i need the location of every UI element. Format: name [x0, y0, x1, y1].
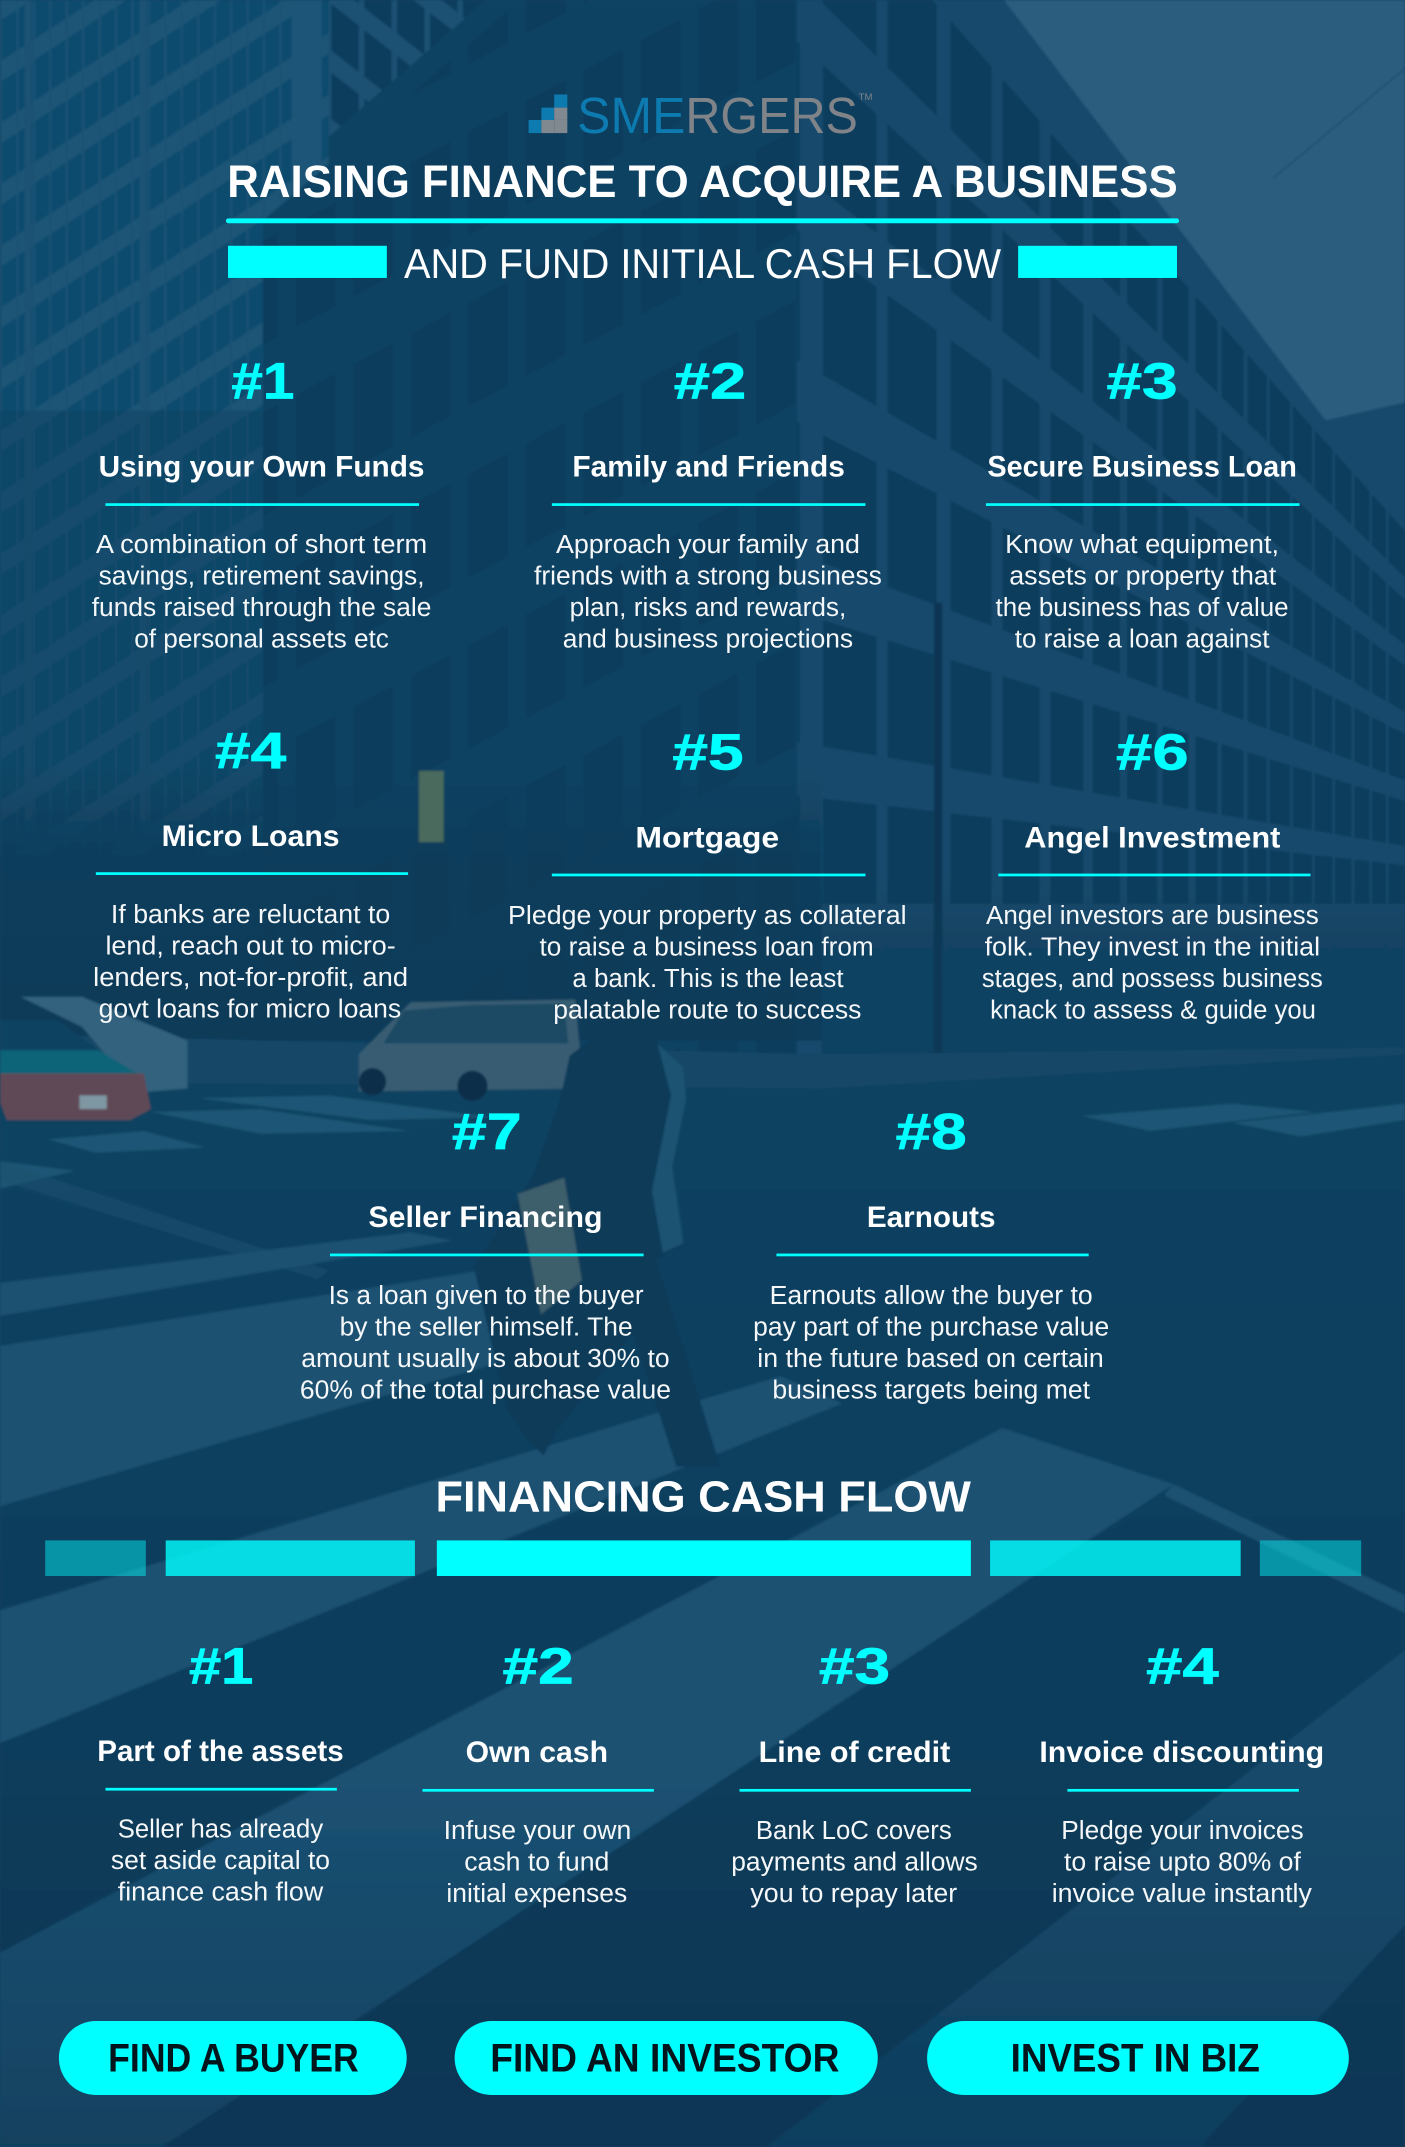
taxi	[0, 997, 188, 1120]
item 8: Earnouts: pay part of the purchase value	[753, 1314, 1109, 1342]
parked SUV	[359, 1000, 583, 1101]
lamp pole	[934, 602, 942, 1082]
pedestrian	[474, 1026, 720, 1466]
overhead wire	[1274, 68, 1405, 178]
cash flow 3: Line of credit: payments and allows	[731, 1848, 978, 1876]
traffic light	[419, 771, 444, 842]
item 7: Seller Financing: by the seller himself. The	[340, 1314, 633, 1342]
item 1: Using your Own Funds: savings, retirement savings,	[99, 563, 425, 591]
item 5: Mortgage: Pledge your property as collateral	[508, 902, 907, 930]
item 4: Micro Loans: Micro Loans	[162, 820, 340, 853]
sidewalk	[0, 1034, 1405, 1089]
item 8: Earnouts	[753, 1103, 1109, 1405]
item 7: Seller Financing: Seller Financing	[368, 1201, 603, 1234]
item 2: Family and Friends: Family and Friends	[572, 451, 845, 484]
item 5: Mortgage: a bank. This is the least	[572, 965, 844, 993]
item 4: Micro Loans: #4	[215, 722, 286, 779]
item 2: Family and Friends: and business projections	[563, 626, 853, 654]
subtitle with side bars: AND FUND INITIAL CASH FLOW	[404, 240, 1002, 287]
item 5: Mortgage: palatable route to success	[553, 997, 861, 1025]
item 2: Family and Friends	[534, 352, 882, 654]
item 6: Angel Investment: Angel Investment	[1024, 822, 1281, 855]
logo: SMERGERS: RGERS	[685, 87, 858, 144]
title underline	[226, 218, 1179, 223]
item 3: Secure Business Loan: Know what equipment,	[1005, 531, 1279, 559]
cash flow 4: Invoice discounting: #4	[1146, 1638, 1219, 1695]
item 1: Using your Own Funds: Using your Own Funds	[99, 451, 425, 484]
cash flow 3: Line of credit: you to repay later	[750, 1880, 958, 1908]
cash flow 1: Part of the assets: Part of the assets	[97, 1735, 344, 1768]
logo: SMERGERS: TM	[859, 92, 872, 103]
item 6: Angel Investment: stages, and possess business	[982, 965, 1323, 993]
item 2: Family and Friends: plan, risks and rewards,	[570, 594, 846, 622]
cash flow 3: Line of credit: #3	[819, 1638, 890, 1695]
cash flow 3: Line of credit	[731, 1638, 978, 1908]
cash flow 4: Invoice discounting	[1039, 1638, 1324, 1908]
cash flow 4: Invoice discounting: to raise upto 80% of	[1064, 1848, 1302, 1876]
item 1: Using your Own Funds: funds raised through the sale	[92, 594, 431, 622]
item 1: Using your Own Funds	[92, 352, 431, 654]
item 5: Mortgage: #5	[672, 724, 744, 781]
button: Invest in Biz: INVEST IN BIZ	[1011, 2037, 1260, 2081]
curb line	[0, 1161, 329, 1279]
cash flow 4: Invoice discounting: Pledge your invoices	[1061, 1817, 1304, 1845]
item 2: Family and Friends: Approach your family and	[556, 531, 860, 559]
segmented bar	[45, 1540, 1361, 1576]
heading: Financing Cash Flow: FINANCING CASH FLOW	[435, 1474, 971, 1522]
street	[0, 1054, 1405, 2147]
left glass building	[0, 0, 486, 876]
button: Find a Buyer: FIND A BUYER	[108, 2037, 359, 2081]
item 3: Secure Business Loan: to raise a loan against	[1015, 626, 1269, 654]
far crosswalk stripes	[0, 1095, 1405, 1189]
item 7: Seller Financing: amount usually is about 30% to	[301, 1345, 670, 1373]
title: RAISING FINANCE TO ACQUIRE A BUSINESS	[227, 156, 1178, 207]
item 6: Angel Investment	[982, 724, 1323, 1025]
item 6: Angel Investment: folk. They invest in the initial	[985, 934, 1320, 962]
item 6: Angel Investment: #6	[1116, 724, 1189, 781]
button: Find an Investor: FIND AN INVESTOR	[490, 2037, 839, 2081]
crossing stripes	[0, 1232, 1405, 2147]
cash flow 1: Part of the assets: set aside capital to	[111, 1847, 330, 1875]
storefronts	[0, 767, 822, 1041]
button: Find a Buyer	[59, 2021, 407, 2095]
item 6: Angel Investment: Angel investors are business	[986, 902, 1319, 930]
item 8: Earnouts: business targets being met	[772, 1377, 1090, 1405]
item 2: Family and Friends: friends with a strong business	[534, 563, 882, 591]
item 1: Using your Own Funds: #1	[231, 352, 294, 409]
item 1: Using your Own Funds: A combination of short term	[96, 531, 427, 559]
item 2: Family and Friends: #2	[674, 352, 746, 409]
cash flow 4: Invoice discounting: invoice value instantly	[1052, 1880, 1312, 1908]
item 3: Secure Business Loan: Secure Business Loan	[987, 451, 1297, 484]
button: Find an Investor	[455, 2021, 878, 2095]
item 4: Micro Loans: If banks are reluctant to	[111, 901, 390, 929]
item 7: Seller Financing: 60% of the total purchase value	[300, 1377, 671, 1405]
cash flow 4: Invoice discounting: Invoice discounting	[1039, 1736, 1324, 1769]
item 5: Mortgage: Mortgage	[635, 822, 779, 855]
bottom shading	[0, 1780, 1405, 2147]
cash flow 2: Own cash: #2	[503, 1638, 574, 1695]
item 4: Micro Loans	[93, 722, 408, 1023]
item 7: Seller Financing: Is a loan given to the buyer	[329, 1282, 644, 1310]
item 7: Seller Financing	[300, 1103, 671, 1405]
cash flow 1: Part of the assets: finance cash flow	[118, 1879, 324, 1907]
item 8: Earnouts: #8	[896, 1103, 967, 1160]
item 4: Micro Loans: govt loans for micro loans	[99, 995, 401, 1023]
item 7: Seller Financing: #7	[452, 1103, 522, 1160]
item 4: Micro Loans: lenders, not-for-profit, and	[93, 964, 408, 992]
button: Invest in Biz	[927, 2021, 1349, 2095]
cash flow 3: Line of credit: Bank LoC covers	[756, 1817, 952, 1845]
cash flow 3: Line of credit: Line of credit	[759, 1736, 951, 1769]
subtitle with side bars	[228, 240, 1177, 287]
logo: SMERGERS	[529, 87, 872, 144]
item 3: Secure Business Loan	[986, 352, 1300, 654]
item 6: Angel Investment: knack to assess & guide you	[990, 997, 1316, 1025]
item 8: Earnouts: Earnouts allow the buyer to	[770, 1282, 1093, 1310]
item 8: Earnouts: Earnouts	[867, 1201, 996, 1234]
item 8: Earnouts: in the future based on certain	[757, 1345, 1104, 1373]
cash flow 2: Own cash: Own cash	[466, 1736, 608, 1769]
item 3: Secure Business Loan: assets or property that	[1009, 563, 1276, 591]
cash flow 2: Own cash	[422, 1638, 654, 1908]
sky	[1004, 0, 1405, 420]
cash flow 2: Own cash: Infuse your own	[444, 1817, 631, 1845]
item 3: Secure Business Loan: the business has of value	[996, 594, 1289, 622]
cash flow 1: Part of the assets	[97, 1638, 344, 1907]
logo: SMERGERS: SME	[577, 87, 685, 144]
cash flow 2: Own cash: cash to fund	[464, 1848, 609, 1876]
item 5: Mortgage	[508, 724, 907, 1025]
item 3: Secure Business Loan: #3	[1106, 352, 1178, 409]
cash flow 1: Part of the assets: Seller has already	[118, 1816, 323, 1844]
cash flow 1: Part of the assets: #1	[189, 1638, 253, 1695]
item 1: Using your Own Funds: of personal assets etc	[134, 626, 389, 654]
cash flow 2: Own cash: initial expenses	[446, 1880, 627, 1908]
item 4: Micro Loans: lend, reach out to micro-	[105, 932, 396, 960]
right office building	[797, 0, 1405, 1082]
central dark building	[263, 0, 797, 1082]
item 5: Mortgage: to raise a business loan from	[540, 934, 874, 962]
